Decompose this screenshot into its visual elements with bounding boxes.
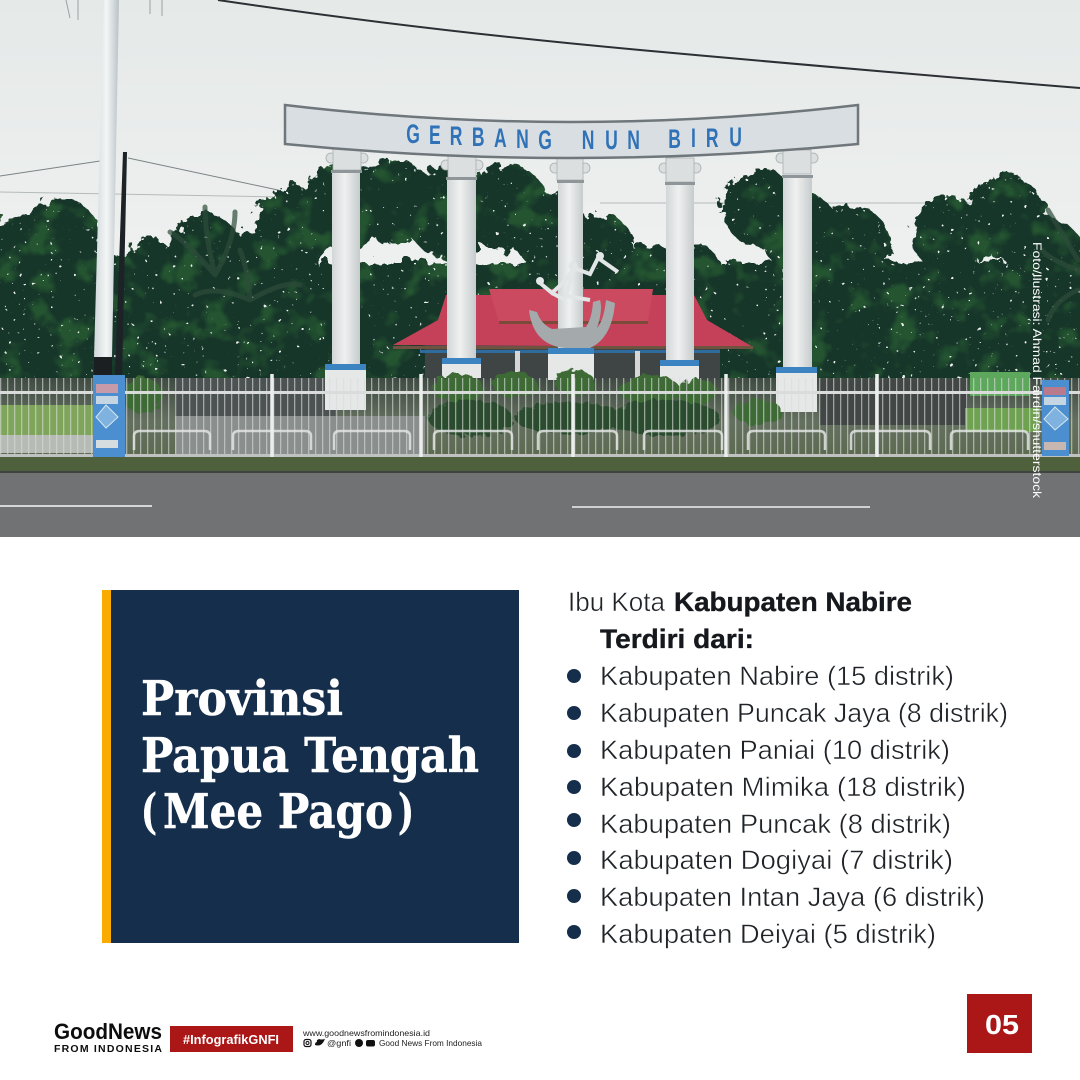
columns [325, 148, 818, 412]
list item: Puncak: Kabupaten Puncak (8 distrik) [600, 809, 951, 839]
list item: Paniai: Kabupaten Paniai (10 distrik) [600, 735, 950, 765]
arch inscription: GERBANG NUN BIRU [406, 118, 742, 155]
heading: Provinsi [141, 671, 343, 727]
roadside grass [0, 457, 1080, 472]
list heading: Terdiri dari: [600, 624, 754, 654]
dancers and boat sculpture [529, 252, 618, 348]
list item: Nabire: Kabupaten Nabire (15 distrik) [600, 661, 954, 691]
road [0, 471, 1080, 537]
footer logo [54, 1019, 162, 1055]
heading: Mee Pago [163, 784, 393, 840]
pavilion with red roof [393, 289, 753, 379]
footer logo: FROM INDONESIA [54, 1043, 162, 1055]
fence backdrop [0, 372, 1080, 458]
capital city line: Ibu Kota [568, 587, 666, 617]
footer logo: GoodNews [54, 1019, 162, 1044]
list item: Mimika: Kabupaten Mimika (18 distrik) [600, 772, 966, 802]
website and social handles: www.goodnewsfromindonesia.id [302, 1028, 430, 1038]
list item: Puncak Jaya: Kabupaten Puncak Jaya (8 distrik) [600, 698, 1008, 728]
list item: Dogiyai: Kabupaten Dogiyai (7 distrik) [600, 845, 953, 875]
photo credit: Foto/Ilustrasi: Ahmad Fairdin/shutterstock [1030, 242, 1044, 499]
heading: ( [141, 784, 157, 840]
fence and garden [0, 370, 1080, 458]
list item: Intan Jaya: Kabupaten Intan Jaya (6 distrik) [600, 882, 985, 912]
capital city line: Kabupaten Nabire [674, 587, 912, 617]
tree line [0, 160, 1080, 382]
capital city line [568, 587, 912, 617]
navy panel [111, 590, 519, 943]
page number badge: 05 [985, 1009, 1019, 1040]
website and social handles: @gnfi [327, 1038, 351, 1048]
page number badge [967, 994, 1032, 1053]
arch beam [285, 105, 858, 158]
heading [141, 671, 479, 840]
panel: province title [102, 590, 519, 943]
yellow accent bar [102, 590, 111, 943]
hashtag badge: #InfografikGNFI [183, 1033, 279, 1047]
website and social handles [302, 1028, 482, 1048]
regency list [567, 661, 1008, 949]
overhead cables [0, 0, 1080, 203]
blue gate pillars [93, 375, 1069, 458]
sky [0, 0, 1080, 537]
palm fronds [170, 207, 1078, 320]
utility poles [66, 0, 162, 376]
heading: ) [398, 784, 414, 840]
heading: Papua Tengah [141, 728, 479, 784]
website and social handles: Good News From Indonesia [379, 1038, 482, 1048]
photo: Gerbang Nun Biru monument [0, 0, 1080, 537]
list item: Deiyai: Kabupaten Deiyai (5 distrik) [600, 919, 936, 949]
hashtag badge [170, 1026, 293, 1052]
